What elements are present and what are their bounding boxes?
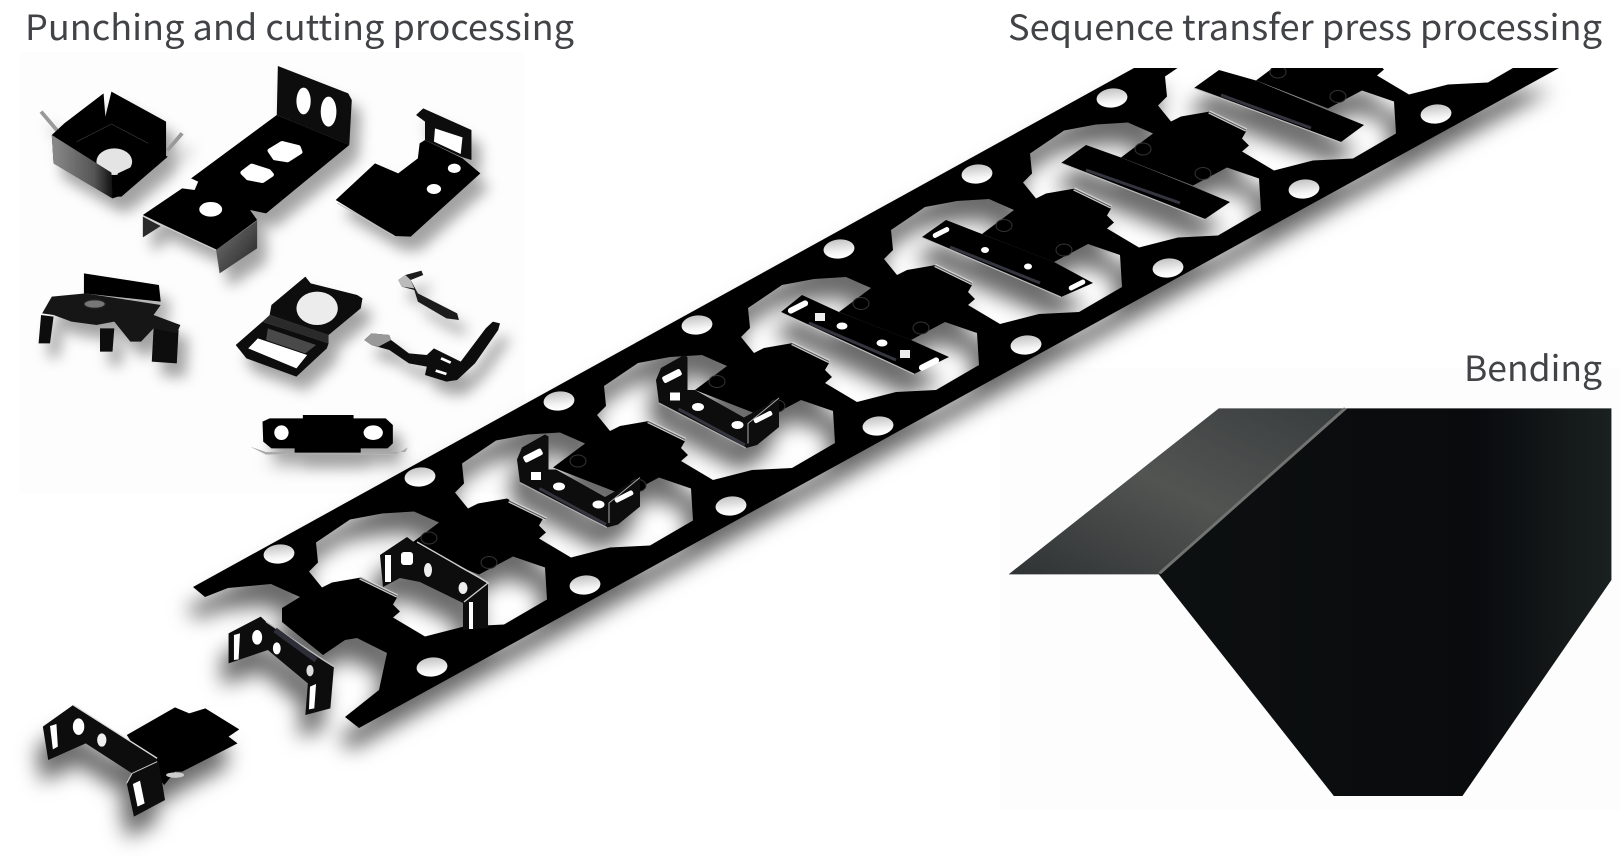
stage 3: U bracket <box>648 355 785 448</box>
part: flat plate with two holes <box>250 415 408 455</box>
heading: punching and cutting processing: Punching and cutting processing <box>25 0 574 51</box>
stage 2: U bracket <box>509 434 646 528</box>
panel: bending background <box>1000 368 1620 810</box>
heading: sequence transfer press processing: Sequence transfer press processing <box>1008 0 1602 51</box>
part: finished separated bracket <box>43 705 239 817</box>
chart: progressive die strip <box>193 66 1559 728</box>
stage 0: open end bracket <box>229 617 334 715</box>
part: square box <box>41 92 182 198</box>
main face <box>1159 408 1611 796</box>
part: large bracket <box>143 66 352 273</box>
part: framed bracket with round hole <box>236 277 362 377</box>
stage 4: flat tab with slots <box>781 295 949 374</box>
panel: bent sheet <box>1009 408 1611 796</box>
stage 7: flat tab <box>1194 66 1364 142</box>
part: angled strip <box>364 322 500 382</box>
heading: bending: Bending <box>1464 341 1602 392</box>
flange <box>1009 408 1347 574</box>
bend highlight <box>1160 408 1345 573</box>
part: bracket with legs <box>39 273 180 363</box>
part: plate with loop <box>336 108 480 237</box>
stage 6: flat tab <box>1061 143 1230 220</box>
stage 5: flat tab with slots <box>922 220 1093 297</box>
stage 1: bent bracket <box>360 532 497 630</box>
part: small hook <box>398 271 459 320</box>
strip pilot holes <box>263 87 1452 678</box>
strip body with punched windows <box>193 68 1559 728</box>
panel: punched parts <box>39 66 500 455</box>
panel: punching background <box>19 52 525 493</box>
